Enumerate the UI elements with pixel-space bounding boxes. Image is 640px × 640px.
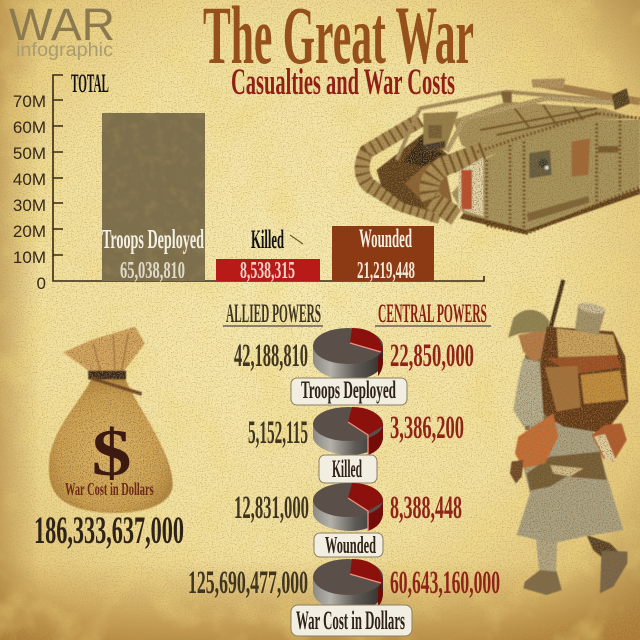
side bag [592,423,627,462]
label: War Cost in Dollars [296,606,405,635]
bar: killed: 8,538,315 [240,258,295,284]
axis labels: 50M [13,144,46,163]
canteen cup [575,305,605,335]
label: Troops Deployed [301,377,396,404]
chart axes [53,75,484,281]
far track [362,120,440,217]
cab [423,112,458,150]
row: troops deployed: 42,188,810 [234,338,308,374]
illustration: tank [362,78,640,234]
coat [517,422,623,543]
subtitle: Casualties and War Costs [231,62,455,103]
axis labels: 20M [13,222,46,241]
helmet [508,310,549,337]
lower track [460,188,640,234]
track interior shadow [377,133,450,217]
axis labels: 10M [13,248,46,267]
label [291,377,407,405]
hull side [452,120,640,233]
bar: troops deployed [102,113,205,284]
row: killed: 5,152,115 [248,415,308,451]
bar: wounded: Wounded [359,224,412,253]
rifle [548,280,563,337]
central value: 8,388,448 [390,490,462,526]
text: ALLIED POWERS [226,299,321,328]
allied powers heading [223,299,323,328]
central value: 22,850,000 [390,338,474,374]
row: troops deployed [234,328,474,405]
side door [529,150,552,178]
front leg and boot [536,538,557,575]
central value: 60,643,160,000 [390,565,500,601]
row: wounded [234,483,462,559]
near track [429,152,483,217]
bar: killed [216,225,320,284]
rails [397,92,620,160]
lower plate [527,196,589,222]
hull top [453,102,637,158]
central powers heading [375,299,491,328]
back pack [540,327,628,433]
total war cost: 186,333,637,000 [34,509,184,552]
text: CENTRAL POWERS [378,299,487,328]
pie chart [313,559,383,611]
logo: WAR infographic: infographic [16,40,113,61]
pie chart [313,483,383,531]
bar: killed: Killed [251,225,284,254]
illustration: soldier [508,280,628,595]
row: war cost [188,559,500,636]
icon: money bag [49,327,173,513]
label [291,605,412,636]
unditching beam [533,83,640,102]
axis labels [13,92,46,293]
label [319,455,377,483]
bar: wounded [332,224,434,284]
hand [510,460,523,483]
axis labels: 0 [37,274,46,293]
chart: total casualties bars [13,69,484,293]
allied value: 125,690,477,000 [188,565,308,601]
red and white marking [458,157,483,217]
label [314,533,383,559]
row: killed [248,407,464,483]
allied value: 12,831,000 [234,490,309,526]
axis labels: 60M [13,118,46,137]
dollar sign: $ [92,417,132,490]
rust patch [572,138,590,177]
bag caption: War Cost in Dollars [65,479,154,499]
satchel [515,413,558,468]
axis labels: 40M [13,170,46,189]
pie chart [313,328,383,380]
pie chart [313,407,383,455]
label: Killed [332,456,362,483]
chart: total casualties bars: TOTAL [71,69,109,98]
label: Wounded [325,533,376,559]
hull rivets [473,113,640,233]
bag body and top [49,327,173,513]
bar: troops deployed: 65,038,810 [120,258,185,284]
central value: 3,386,200 [390,410,464,446]
axis labels: 30M [13,196,46,215]
bar: troops deployed: Troops Deployed [102,224,204,254]
bar: wounded: 21,219,448 [357,258,415,284]
logo: WAR infographic: WAR [9,0,115,50]
face [518,330,547,362]
sleeve [513,358,546,427]
axis labels: 70M [13,92,46,111]
torso under the sleeve [525,352,560,430]
back leg and boot [587,535,618,560]
